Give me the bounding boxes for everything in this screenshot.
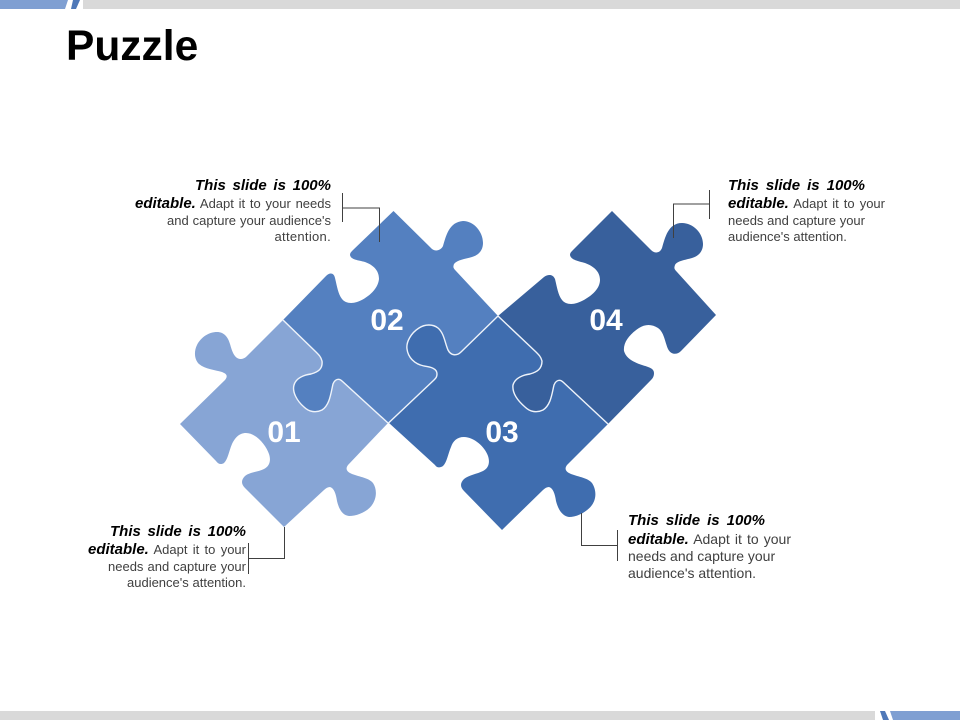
piece 02 xyxy=(283,211,498,423)
text block: piece 02: editable. Adapt it to your needs xyxy=(135,195,331,212)
text block: piece 03: This slide is 100% xyxy=(628,512,765,529)
text block: piece 04: needs and capture your xyxy=(728,213,865,228)
number 02: 02 xyxy=(370,304,404,337)
connector: piece 01 to text xyxy=(248,527,285,574)
seam: pieces 03 and 04 xyxy=(498,316,608,424)
text block: piece 03: needs and capture your xyxy=(628,548,775,564)
connector: piece 02 to text xyxy=(342,193,380,242)
text block: piece 04: audience's attention. xyxy=(728,229,847,244)
connector: piece 03 to text xyxy=(581,513,618,561)
number 03: 03 xyxy=(485,416,519,449)
top header bar xyxy=(0,0,960,9)
text block: piece 01: audience's attention. xyxy=(127,575,246,590)
text block: piece 02: This slide is 100% xyxy=(195,177,331,194)
text block: piece 01: editable. Adapt it to your xyxy=(88,541,246,558)
text block: piece 04: This slide is 100% xyxy=(728,177,865,194)
piece 04 xyxy=(498,211,716,424)
title: Puzzle xyxy=(66,23,198,70)
seam: pieces 01 and 02 xyxy=(283,320,388,423)
seam: pieces 02 and 03 xyxy=(388,316,498,423)
piece 01 xyxy=(180,320,388,527)
text block: piece 02: and capture your audience's xyxy=(167,213,331,228)
piece 03 xyxy=(389,316,608,530)
text block: piece 04: editable. Adapt it to your xyxy=(728,195,885,212)
text block: piece 03 xyxy=(628,512,791,581)
text block: piece 01 xyxy=(88,523,246,590)
text block: piece 01: needs and capture your xyxy=(108,559,246,574)
footer bar xyxy=(0,711,960,720)
text block: piece 03: audience's attention. xyxy=(628,565,756,581)
text block: piece 02: attention. xyxy=(274,229,331,244)
text block: piece 03: editable. Adapt it to your xyxy=(628,531,791,548)
text block: piece 02 xyxy=(135,177,331,244)
number 01: 01 xyxy=(267,416,301,449)
text block: piece 04 xyxy=(728,177,885,244)
connector: piece 04 to text xyxy=(673,190,710,238)
text block: piece 01: This slide is 100% xyxy=(110,523,246,540)
number 04: 04 xyxy=(589,304,623,337)
